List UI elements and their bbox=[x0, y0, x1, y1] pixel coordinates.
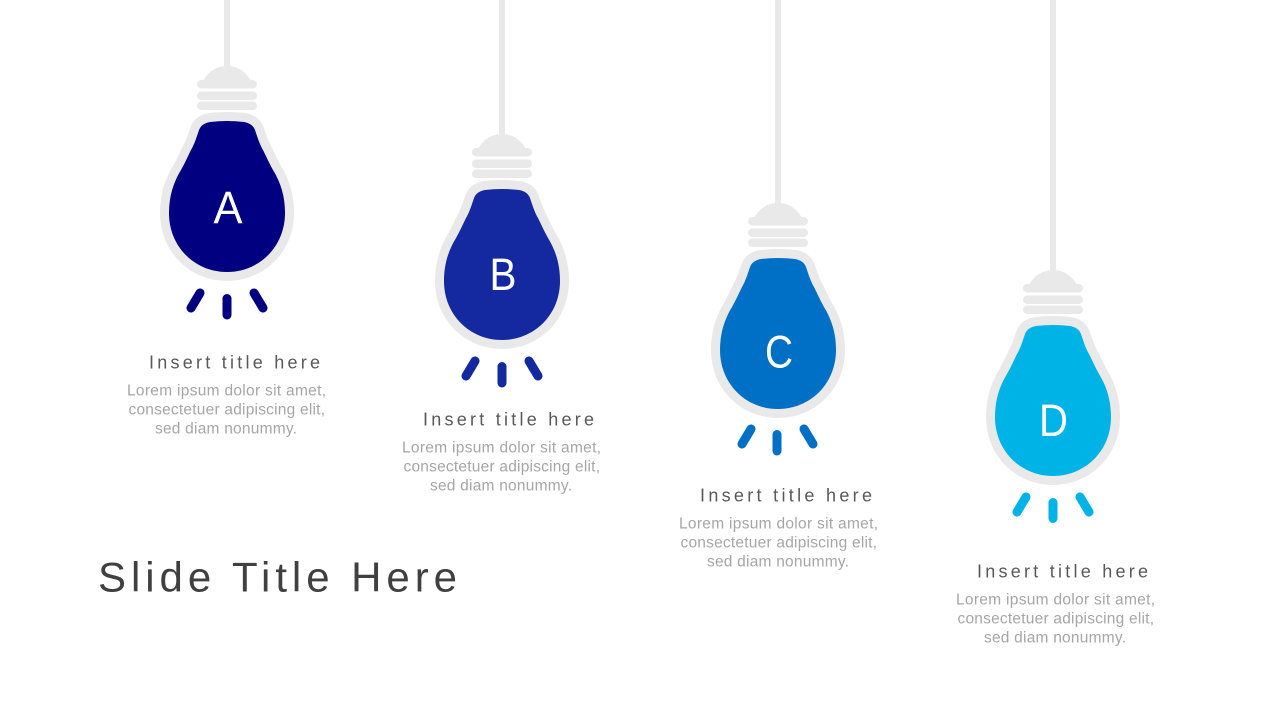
socket A bbox=[197, 66, 257, 110]
item text C: Lorem ipsum dolor sit amet, bbox=[679, 516, 878, 532]
light rays B bbox=[466, 361, 538, 383]
letter C: C bbox=[765, 326, 793, 378]
bulb body C bbox=[720, 258, 836, 409]
panel: bulb A bbox=[127, 0, 326, 438]
item text C: sed diam nonummy. bbox=[707, 554, 849, 570]
item title B: Insert title here bbox=[423, 410, 594, 430]
item text A: sed diam nonummy. bbox=[155, 420, 297, 438]
letter A: A bbox=[214, 182, 242, 233]
bulb body A bbox=[169, 121, 285, 272]
item text A bbox=[127, 382, 326, 438]
item text B bbox=[402, 440, 601, 494]
letter B: B bbox=[490, 249, 516, 300]
socket B bbox=[472, 134, 532, 178]
socket C bbox=[748, 203, 808, 247]
item text B: Lorem ipsum dolor sit amet, bbox=[402, 440, 601, 456]
light rays D bbox=[1017, 497, 1089, 518]
item text D bbox=[956, 592, 1155, 646]
panel: bulb D bbox=[956, 0, 1155, 646]
light rays C bbox=[742, 429, 813, 451]
hanging cord B bbox=[499, 0, 505, 138]
item text B: consectetuer adipiscing elit, bbox=[404, 458, 600, 476]
item text B: sed diam nonummy. bbox=[430, 478, 572, 494]
item title D: Insert title here bbox=[977, 562, 1148, 582]
item text D: Lorem ipsum dolor sit amet, bbox=[956, 592, 1155, 608]
item text A: Lorem ipsum dolor sit amet, bbox=[127, 382, 326, 400]
panel: bulb B bbox=[402, 0, 601, 494]
item title A: Insert title here bbox=[149, 352, 320, 372]
item text C bbox=[679, 516, 878, 570]
item text D: sed diam nonummy. bbox=[984, 630, 1126, 646]
bulb body B bbox=[444, 189, 560, 340]
hanging cord A bbox=[224, 0, 230, 70]
item title C: Insert title here bbox=[700, 486, 872, 506]
hanging cord C bbox=[775, 0, 781, 207]
panel: bulb C bbox=[679, 0, 878, 570]
item text A: consectetuer adipiscing elit, bbox=[128, 402, 325, 418]
letter D: D bbox=[1039, 395, 1068, 446]
socket D bbox=[1023, 270, 1083, 314]
slide title: Slide Title Here bbox=[98, 554, 457, 600]
bulb body D bbox=[995, 325, 1111, 476]
light rays A bbox=[191, 293, 263, 315]
item text C: consectetuer adipiscing elit, bbox=[680, 534, 877, 552]
item text D: consectetuer adipiscing elit, bbox=[958, 610, 1154, 628]
hanging cord D bbox=[1050, 0, 1056, 274]
